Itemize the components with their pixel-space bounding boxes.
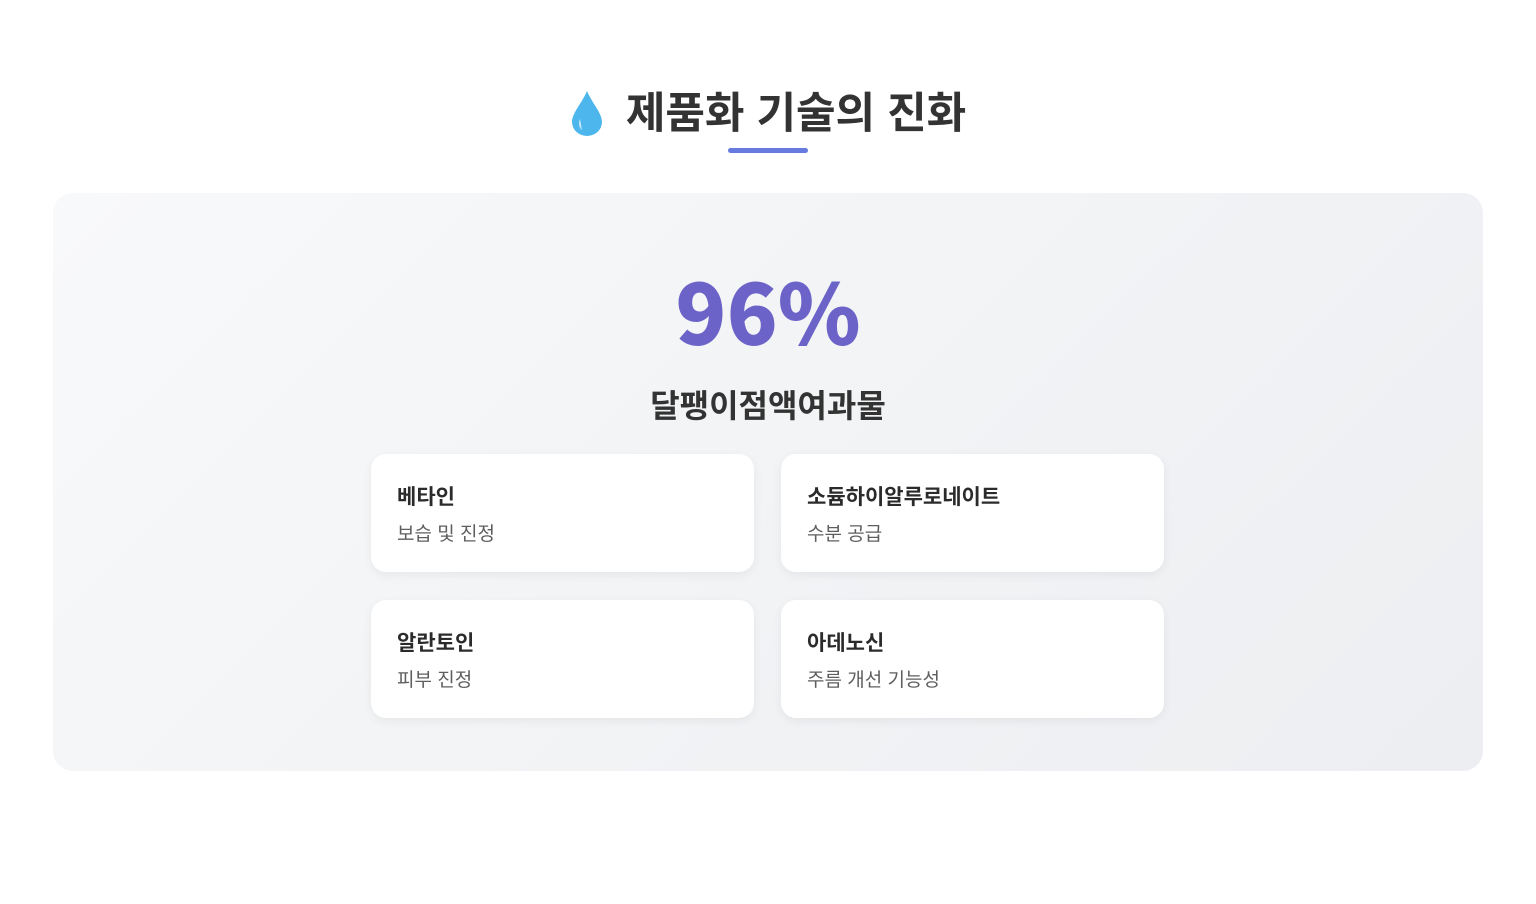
- card title: 소듐하이알루로네이트: [807, 486, 1000, 509]
- card: 베타인: [371, 454, 754, 572]
- stat: 96%: 96%: [675, 249, 861, 370]
- card desc: 보습 및 진정: [397, 524, 495, 545]
- card: 아데노신: [781, 600, 1164, 718]
- card desc: 수분 공급: [807, 524, 882, 545]
- card title: 아데노신: [807, 632, 884, 655]
- title: 제품화 기술의 진화: [626, 90, 966, 138]
- card: 소듐하이알루로네이트: [781, 454, 1164, 572]
- title underline: [728, 148, 808, 153]
- card title: 알란토인: [397, 632, 474, 655]
- stat label: 달팽이점액여과물: [650, 388, 886, 424]
- card: 알란토인: [371, 600, 754, 718]
- card title: 베타인: [397, 486, 455, 509]
- panel: main: [53, 193, 1483, 771]
- card desc: 주름 개선 기능성: [807, 670, 940, 691]
- icon: water drop: [572, 91, 602, 136]
- card desc: 피부 진정: [397, 670, 472, 691]
